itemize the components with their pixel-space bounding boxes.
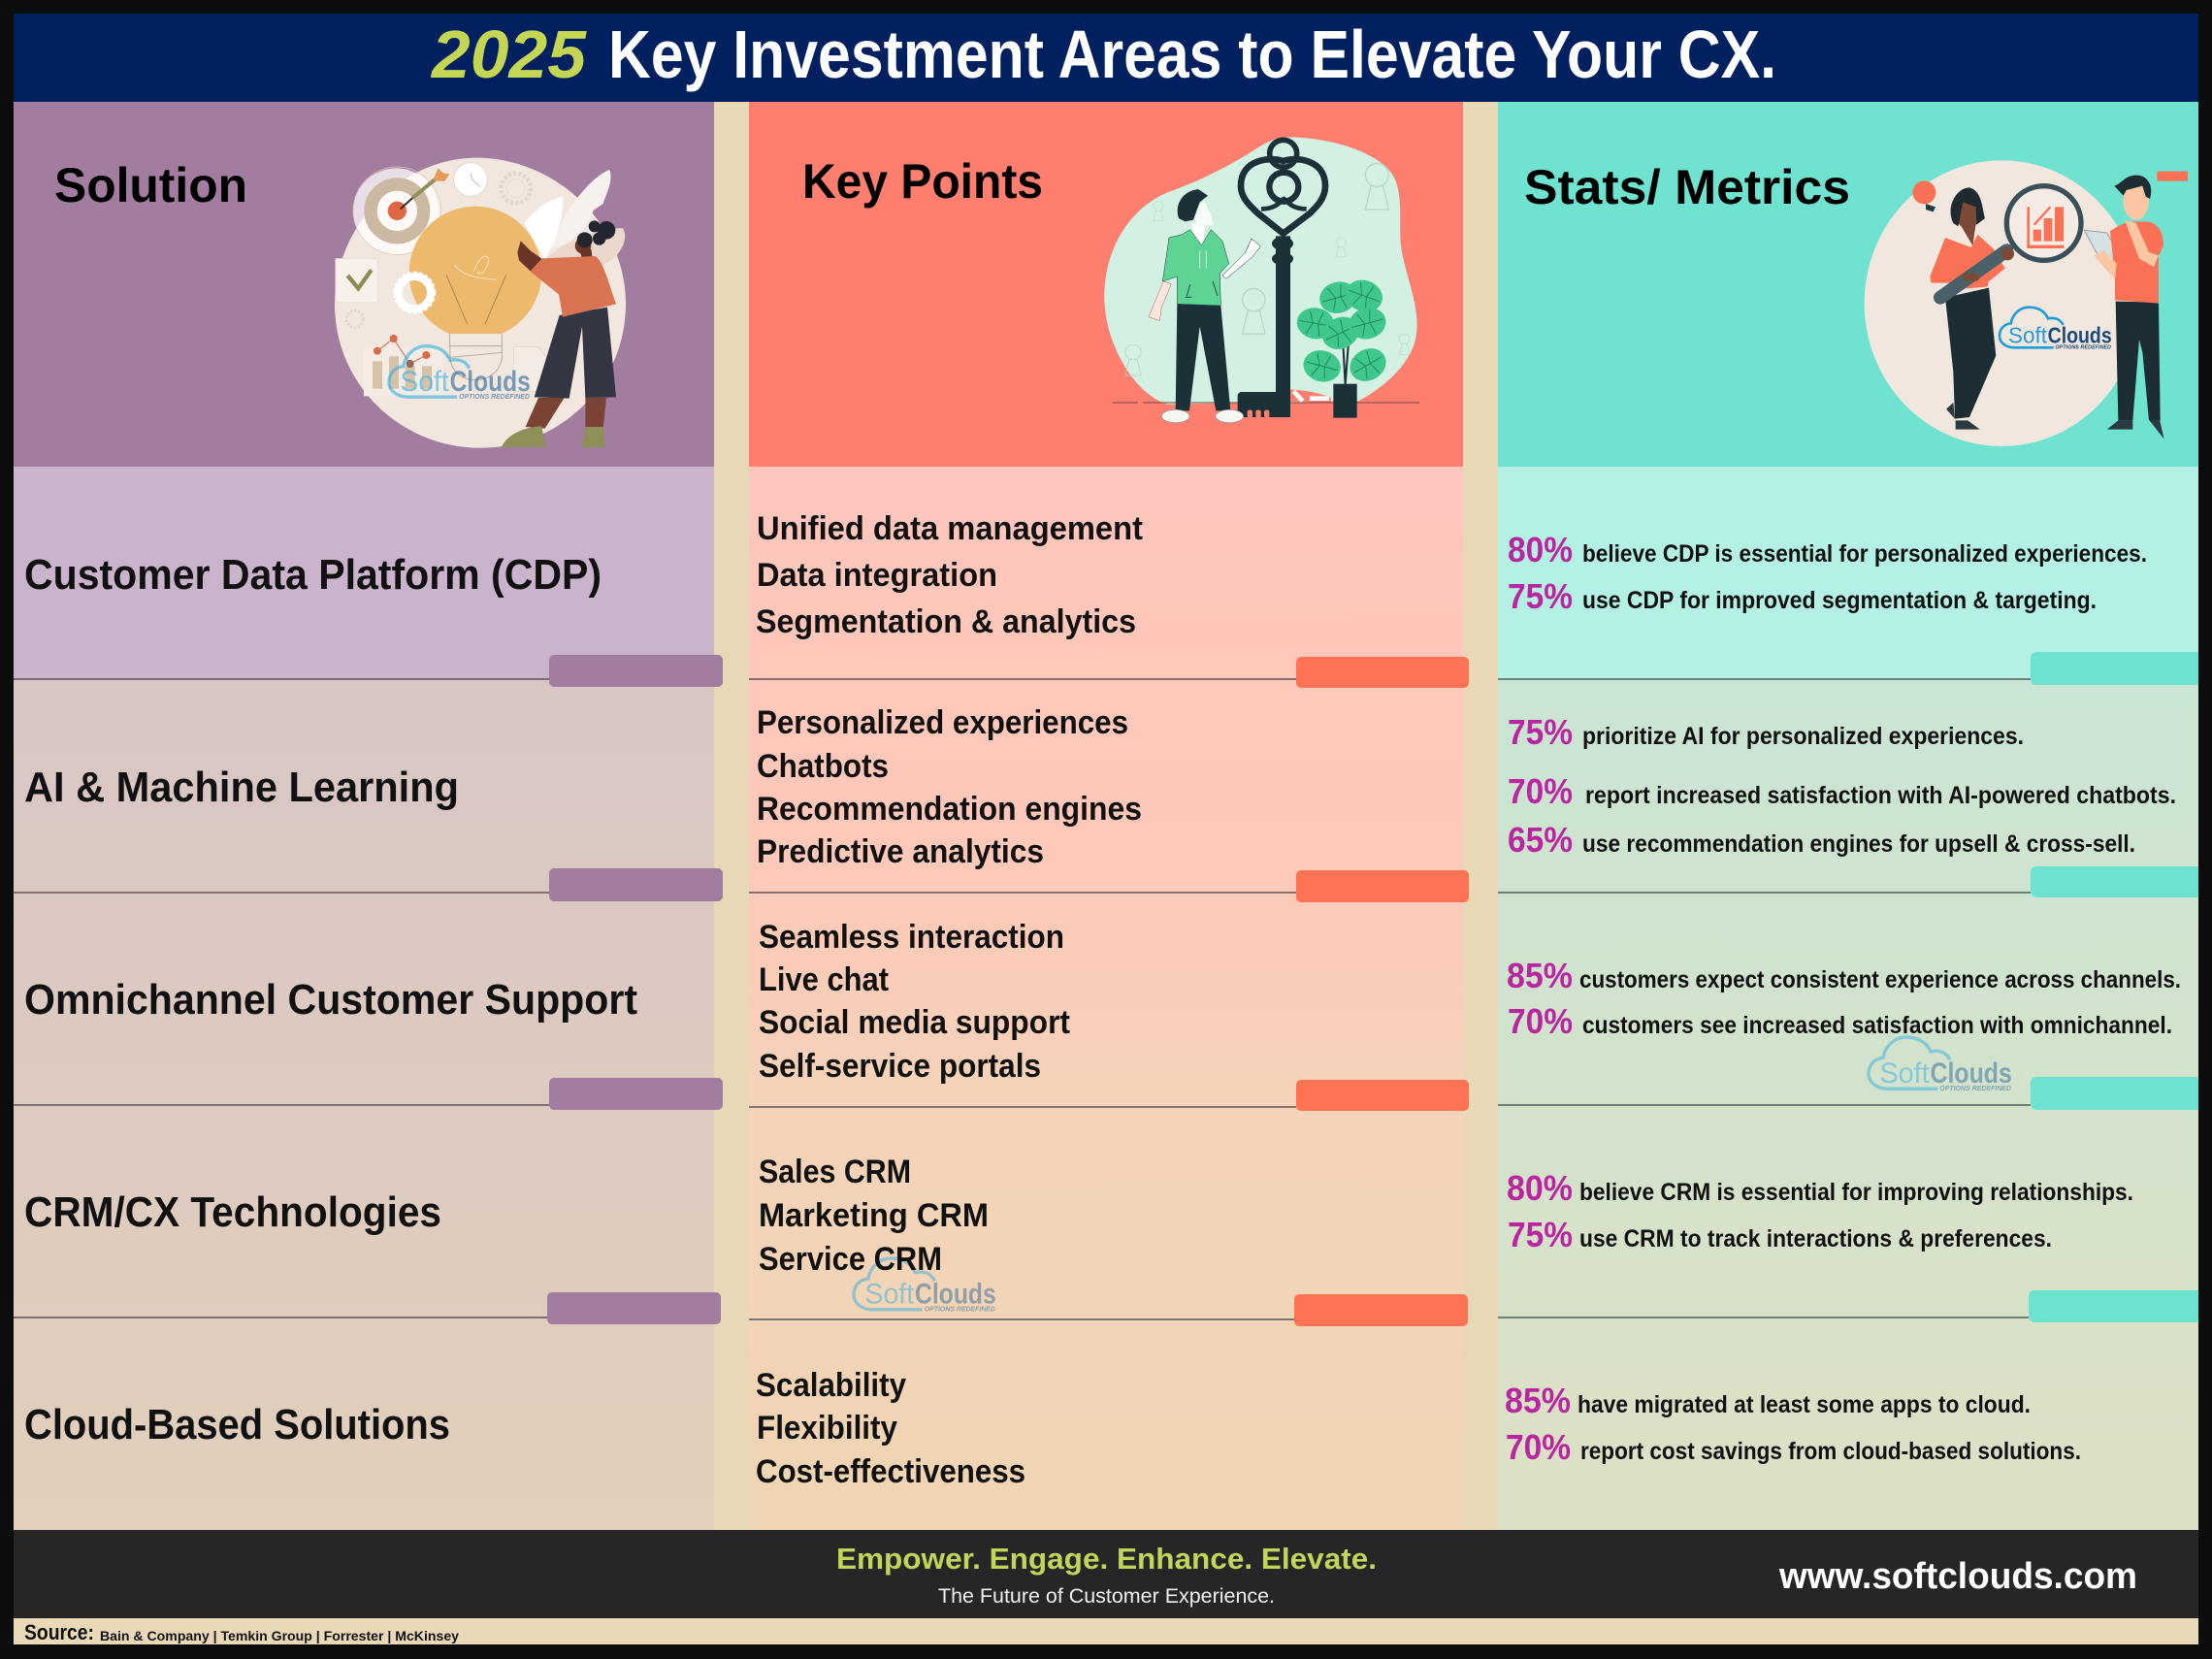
solution names xyxy=(24,551,637,1448)
stats row: CRM: 75% xyxy=(1508,1215,1573,1254)
key points text: Marketing CRM xyxy=(759,1197,989,1234)
magnifying glass xyxy=(1940,186,2081,298)
logo: OPTIONS REDEFINED xyxy=(2055,345,2111,351)
heading: solution: Solution xyxy=(54,158,247,212)
stats row: CRM xyxy=(1507,1168,2133,1254)
title banner xyxy=(14,14,2198,102)
plant xyxy=(1294,275,1392,418)
key points header background xyxy=(749,102,1463,467)
key points text: Unified data management xyxy=(757,510,1143,547)
stats row: CRM: use CRM to track interactions & preferences. xyxy=(1579,1225,2052,1252)
title banner: 2025 xyxy=(430,16,587,92)
logo watermark: Clouds xyxy=(450,366,531,398)
stats row: AI: report increased satisfaction with AI-powered chatbots. xyxy=(1585,782,2176,809)
stats row: CRM: believe CRM is essential for improving relationships. xyxy=(1579,1179,2133,1206)
row tabs: stats xyxy=(2029,652,2198,1322)
man xyxy=(2084,176,2164,439)
man xyxy=(1149,189,1260,423)
stats row: AI: 65% xyxy=(1508,820,1573,860)
logo watermark: OPTIONS REDEFINED xyxy=(459,393,530,401)
panel: key points column xyxy=(749,102,1469,1530)
footer band xyxy=(14,1530,2198,1618)
source strip: Bain & Company | Temkin Group | Forrester | McKinsey xyxy=(100,1628,459,1643)
logo watermark: key points xyxy=(854,1258,996,1314)
stats row: CDP: use CDP for improved segmentation & targeting. xyxy=(1582,587,2097,614)
tagline: Empower. Engage. Enhance. Elevate. xyxy=(836,1542,1377,1576)
solution names: Customer Data Platform (CDP) xyxy=(24,551,602,599)
row dividers: key points xyxy=(749,679,1296,1319)
logo watermark xyxy=(389,346,531,401)
key points text: Scalability xyxy=(756,1367,906,1404)
key points text: Predictive analytics xyxy=(757,833,1044,870)
row tabs: solution xyxy=(547,655,723,1324)
subtitle: The Future of Customer Experience. xyxy=(938,1585,1275,1608)
stats row: CDP: 75% xyxy=(1508,576,1573,616)
stats row: CDP: believe CDP is essential for personalized experiences. xyxy=(1582,540,2147,568)
stats header background xyxy=(1498,102,2198,467)
key points text: Seamless interaction xyxy=(759,919,1064,956)
illustration: analysts with magnifying glass xyxy=(1865,160,2188,446)
stats row: omnichannel: 85% xyxy=(1507,956,1573,995)
illustration: man with giant key xyxy=(1104,137,1419,423)
stats row: AI: 70% xyxy=(1508,771,1573,811)
stats row: CRM: 80% xyxy=(1507,1168,1573,1208)
key points text: Data integration xyxy=(757,557,997,594)
stats row: cloud: 85% xyxy=(1505,1381,1571,1420)
solution header background xyxy=(14,102,714,467)
website: www.softclouds.com xyxy=(1778,1556,2137,1597)
stats row: cloud xyxy=(1505,1381,2081,1467)
heading: stats/metrics: Stats/ Metrics xyxy=(1524,160,1850,214)
stats row: cloud: 70% xyxy=(1506,1427,1571,1467)
key points text: Segmentation & analytics xyxy=(756,603,1136,640)
solution names: Cloud-Based Solutions xyxy=(24,1401,450,1448)
source strip xyxy=(14,1618,2198,1644)
row tabs: key points xyxy=(1294,657,1469,1326)
solution names: CRM/CX Technologies xyxy=(24,1188,441,1236)
logo watermark: key points: OPTIONS REDEFINED xyxy=(925,1305,995,1314)
logo watermark: stats: Clouds xyxy=(1930,1057,2012,1090)
key points text: Self-service portals xyxy=(759,1048,1041,1085)
key points text: Personalized experiences xyxy=(757,704,1128,741)
stats row: AI: use recommendation engines for upsell & cross-sell. xyxy=(1582,830,2135,858)
stats row: cloud: report cost savings from cloud-based solutions. xyxy=(1580,1438,2081,1465)
stats row: AI: 75% xyxy=(1508,712,1573,752)
stats row: AI xyxy=(1508,712,2176,860)
row backgrounds: key points xyxy=(749,467,1463,1530)
panel: stats column xyxy=(1498,102,2198,1530)
stats row: omnichannel xyxy=(1507,956,2181,1041)
title banner: Key Investment Areas to Elevate Your CX. xyxy=(608,16,1776,92)
stats row: CDP xyxy=(1508,530,2147,616)
stats row: CDP: 80% xyxy=(1508,530,1573,569)
row backgrounds: stats xyxy=(1498,467,2198,1530)
illustration: woman pointing at light bulb xyxy=(335,158,626,448)
logo xyxy=(2000,308,2112,351)
stats row: AI: prioritize AI for personalized experiences. xyxy=(1582,723,2024,750)
row dividers: solution xyxy=(14,679,549,1317)
key points text: Live chat xyxy=(759,961,889,998)
heading: key points: Key Points xyxy=(802,154,1043,209)
key points text: Recommendation engines xyxy=(757,791,1142,828)
logo watermark: stats: Soft xyxy=(1880,1057,1930,1090)
key points text: Service CRM xyxy=(759,1241,942,1278)
woman xyxy=(1930,187,2005,430)
key points text: Social media support xyxy=(759,1004,1070,1041)
key points text: Chatbots xyxy=(757,748,889,785)
key points text: Cost-effectiveness xyxy=(756,1453,1025,1490)
row dividers: stats xyxy=(1498,679,2031,1317)
source strip: Source: xyxy=(24,1620,94,1644)
stats row: omnichannel: 70% xyxy=(1508,1001,1573,1041)
logo: Soft xyxy=(2008,322,2047,347)
logo watermark: stats xyxy=(1869,1037,2012,1092)
logo watermark: Soft xyxy=(400,366,449,398)
solution names: Omnichannel Customer Support xyxy=(24,976,637,1024)
logo watermark: key points: Soft xyxy=(864,1279,915,1311)
logo watermark: key points: Clouds xyxy=(915,1279,996,1311)
logo watermark: stats: OPTIONS REDEFINED xyxy=(1939,1084,2012,1092)
logo: Clouds xyxy=(2048,322,2112,347)
key points text: Flexibility xyxy=(757,1410,897,1447)
panel: solution column xyxy=(14,102,723,1530)
panel: column gutters xyxy=(714,102,1498,1530)
key points text: Sales CRM xyxy=(759,1154,911,1190)
stats row: cloud: have migrated at least some apps to cloud. xyxy=(1578,1391,2031,1418)
key points text xyxy=(756,510,1143,1490)
row backgrounds: solution xyxy=(14,467,714,1530)
solution names: AI & Machine Learning xyxy=(24,764,459,811)
